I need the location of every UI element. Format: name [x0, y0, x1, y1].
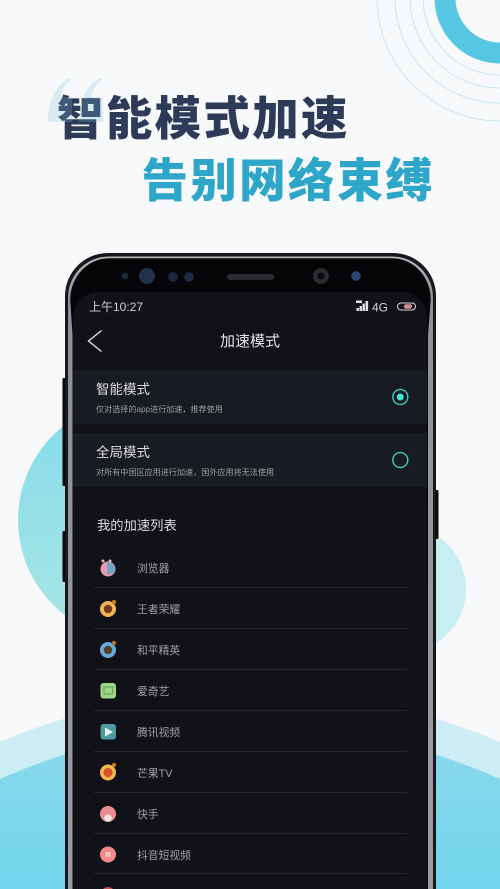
- row: peacekeeper elite: [100, 641, 180, 658]
- panel: global mode: [73, 433, 427, 487]
- radio unselected: [393, 452, 408, 468]
- decoration: concentric rings top right: [377, 0, 500, 121]
- row: tencent video: 腾讯视频: [137, 725, 180, 739]
- row: iqiyi: 爱奇艺: [137, 685, 170, 698]
- row: mango tv: [100, 763, 173, 780]
- screen title: 加速模式: [220, 333, 280, 350]
- icon: signal: [356, 300, 368, 311]
- list heading: 我的加速列表: [97, 518, 177, 533]
- panel: smart mode: [73, 370, 427, 424]
- decoration: right blob: [338, 525, 466, 653]
- heading line 1: 智能模式加速: [57, 93, 350, 145]
- icon: quotation mark: [48, 78, 103, 122]
- status network: 4G: [372, 300, 388, 314]
- row: browser: 浏览器: [137, 561, 170, 575]
- global mode name: 全局模式: [96, 444, 150, 460]
- row: kuaishou: 快手: [137, 807, 159, 821]
- icon: battery: [398, 303, 416, 310]
- row: browser: [100, 560, 170, 576]
- global mode description: 对所有中国区应用进行加速，国外应用将无法使用: [96, 467, 274, 477]
- list of apps: [94, 560, 407, 889]
- phone sensors and camera: [122, 268, 361, 284]
- row: iqiyi: [100, 683, 170, 698]
- row: peacekeeper elite: 和平精英: [137, 643, 180, 657]
- row: douyin: 抖音短视频: [137, 848, 191, 862]
- status bar: [89, 300, 416, 314]
- row: douyin: [100, 846, 191, 862]
- row: tencent video: [100, 724, 180, 740]
- phone: [62, 253, 438, 889]
- smart mode description: 仅对选择的app进行加速，推荐使用: [96, 404, 223, 414]
- decoration: left blob: [18, 400, 258, 640]
- phone side buttons: [62, 378, 438, 582]
- heading line 2: 告别网络束缚: [142, 155, 434, 207]
- radio selected: [393, 390, 408, 404]
- row: honor of kings: [100, 600, 180, 617]
- smart mode name: 智能模式: [96, 382, 150, 397]
- decoration: bottom waves: [0, 691, 500, 889]
- row: kuaishou: [100, 806, 159, 822]
- icon: back arrow: [88, 330, 102, 352]
- status time: 上午10:27: [89, 300, 143, 314]
- phone screen: [73, 292, 427, 889]
- row: mango tv: 芒果TV: [137, 767, 173, 780]
- row: partial icon: [103, 887, 113, 889]
- title: [57, 93, 434, 207]
- phone body: [65, 253, 436, 889]
- row: honor of kings: 王者荣耀: [137, 603, 180, 616]
